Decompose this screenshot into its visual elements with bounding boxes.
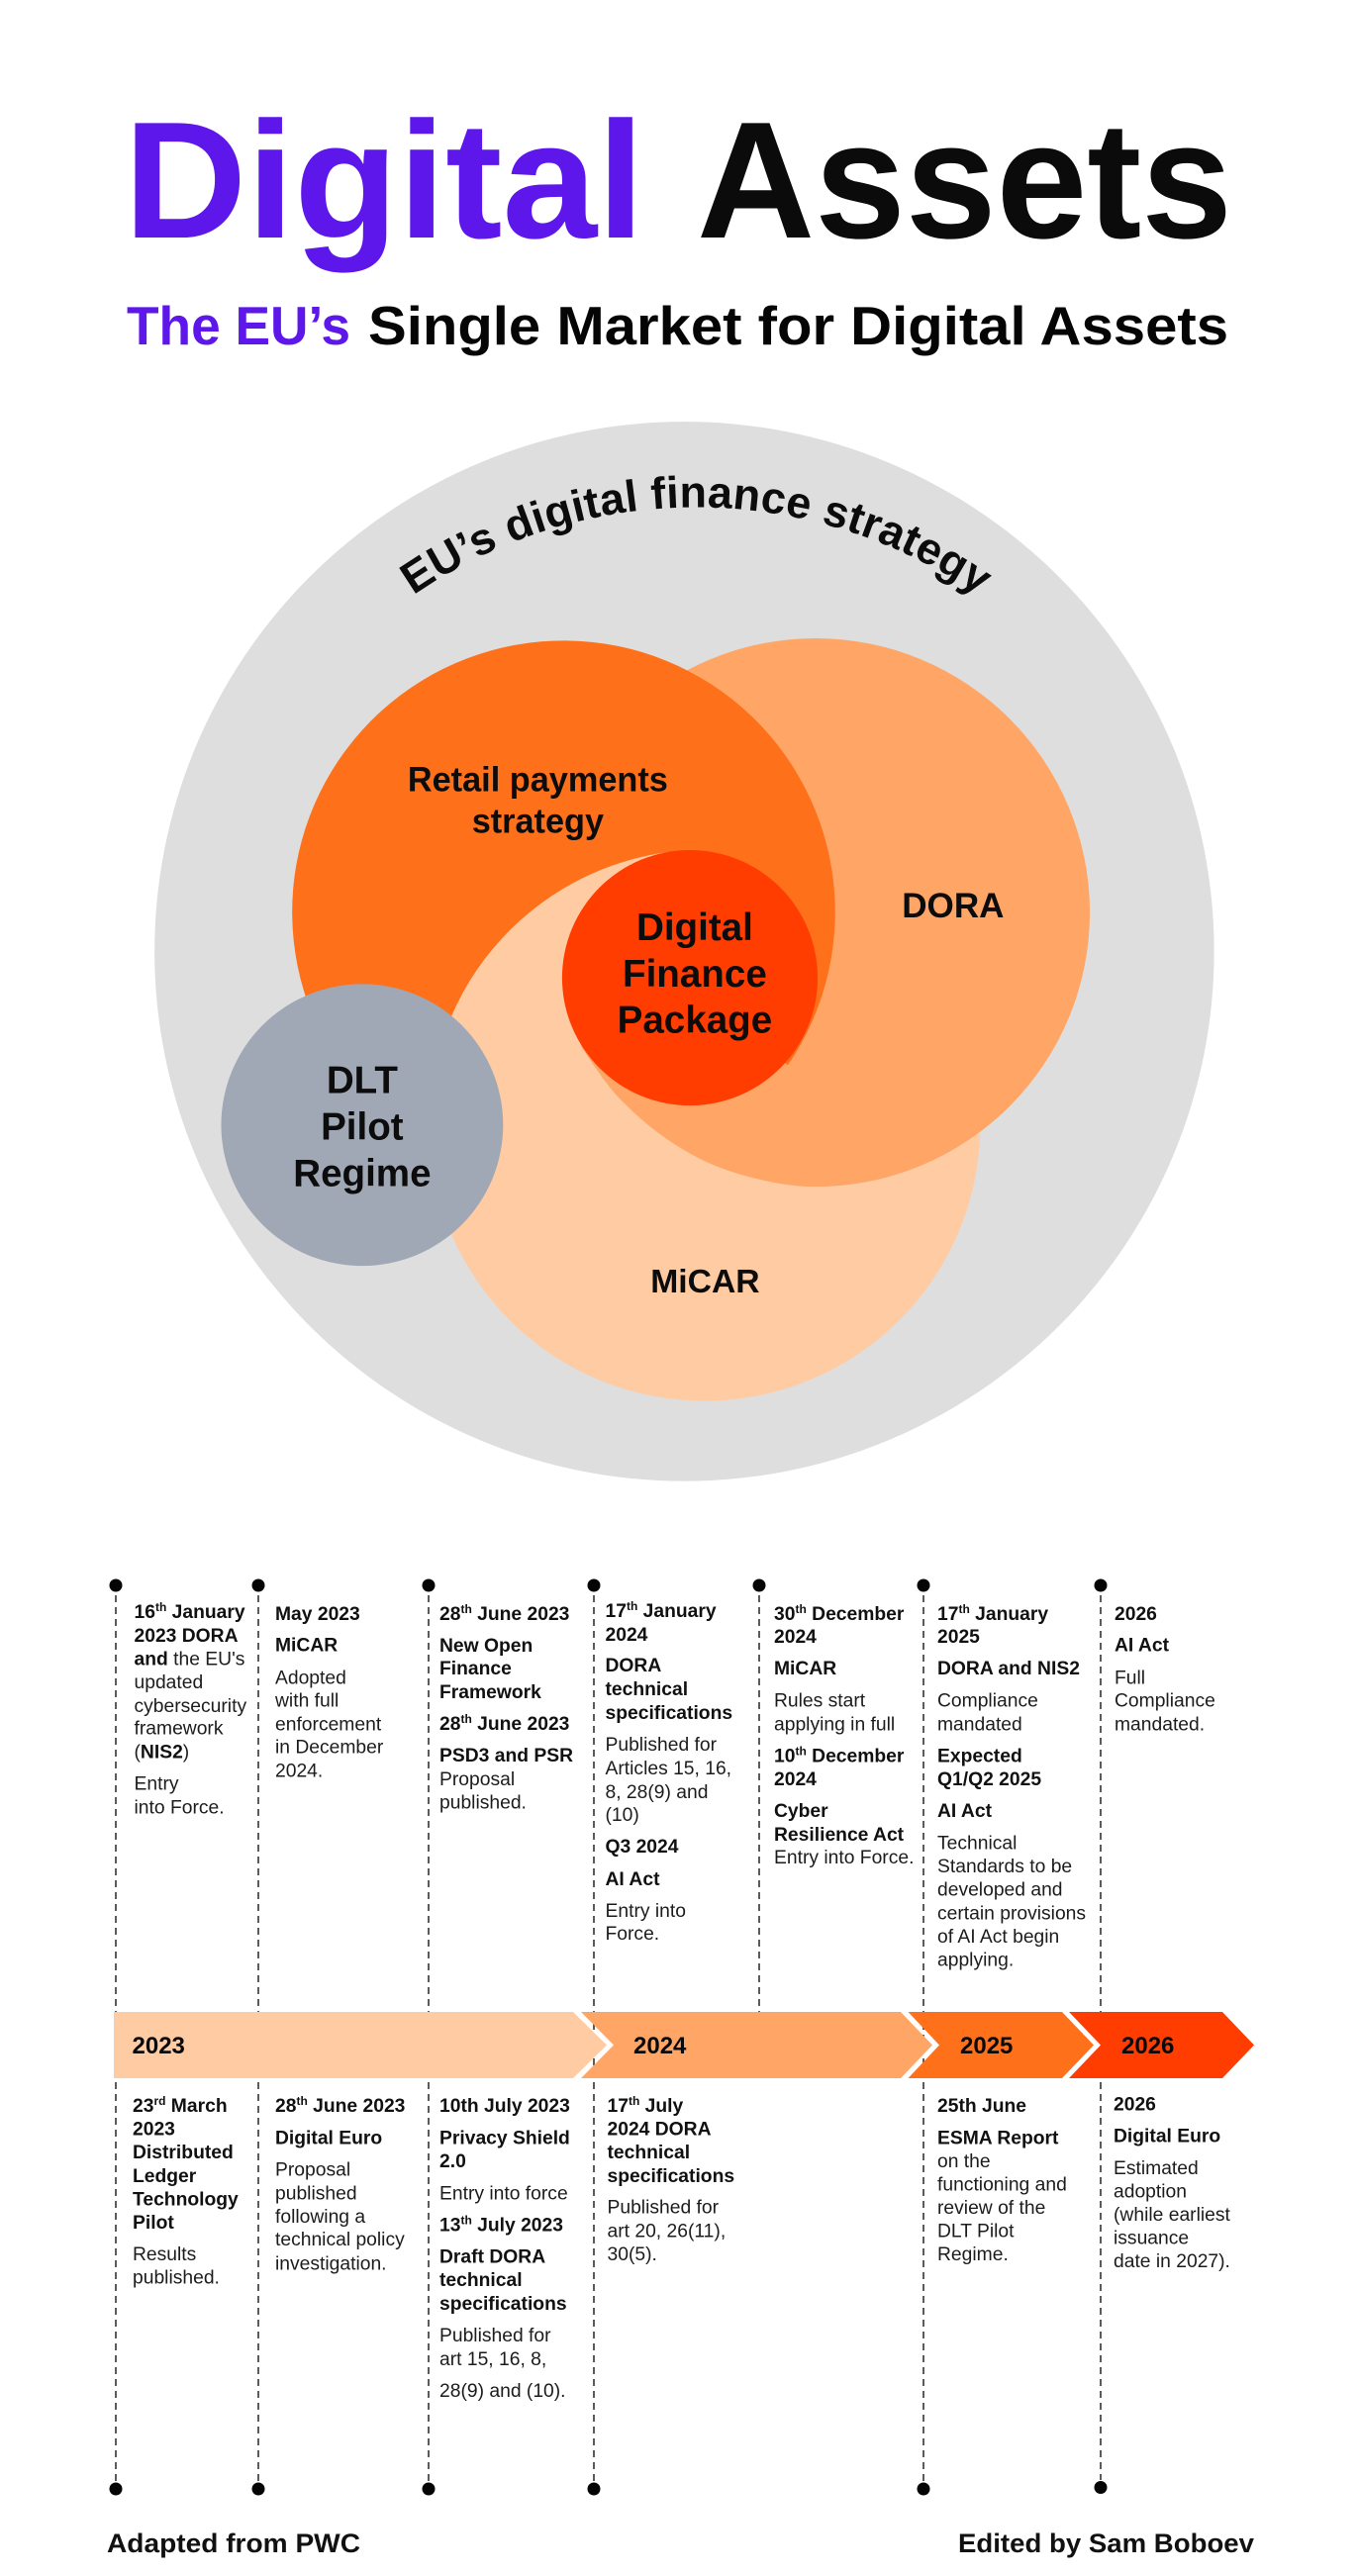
label: Digital Finance Package: Package	[618, 999, 772, 1041]
title: Digital	[124, 87, 644, 273]
entry: January 2024 DORA and Q3 2024 AI Act: (10)	[606, 1805, 639, 1826]
circle: DLT Pilot Regime	[221, 984, 503, 1266]
entry: June 2023 Digital Euro: published	[275, 2183, 357, 2205]
entry: January 2025 DORA and NIS2, AI Act: 17	[937, 1604, 958, 1625]
entry: July 2023 Privacy Shield and draft DORA: 13	[439, 2215, 460, 2237]
label: DLT Pilot Regime: Pilot	[321, 1105, 404, 1148]
entry: March 2023 DLT Pilot: Distributed	[133, 2143, 234, 2163]
entry: December 2024 MiCAR and Cyber Resilience Act: 30	[774, 1604, 795, 1625]
entry: May 2023 MiCAR: May 2023	[275, 1604, 360, 1625]
entry: January 2025 DORA and NIS2, AI Act: th	[958, 1602, 970, 1616]
entry: June 2023 open finance and PSD3: PSD3 and PSR	[439, 1746, 573, 1766]
entry: January 2025 DORA and NIS2, AI Act: Technical	[937, 1834, 1017, 1855]
entry: January 2023 DORA	[135, 1600, 246, 1819]
entry: June 2023 Digital Euro: th	[296, 2094, 308, 2108]
entry: June 2023 open finance and PSD3: Finance	[439, 1659, 512, 1679]
entry: January 2023 DORA: Entry	[135, 1774, 179, 1795]
entry: 2026 Digital Euro	[1114, 2094, 1231, 2272]
entry: January 2023 DORA: and the EU's	[135, 1649, 244, 1670]
entry: January 2024 DORA and Q3 2024 AI Act: Published for	[606, 1735, 718, 1756]
subtitle: The EU’s	[127, 295, 350, 356]
label: DLT Pilot Regime	[293, 1059, 432, 1194]
entry: December 2024 MiCAR and Cyber Resilience Act: MiCAR	[774, 1659, 836, 1679]
entry: July 2023 Privacy Shield and draft DORA: Published for	[439, 2326, 551, 2346]
entry: July 2023 Privacy Shield and draft DORA: July 2023	[472, 2215, 563, 2237]
entry: January 2024 DORA and Q3 2024 AI Act: Entry into	[606, 1901, 686, 1922]
entry: December 2024 MiCAR and Cyber Resilience Act: th	[795, 1602, 807, 1616]
entry: June 2025 ESMA Report: ESMA Report	[937, 2129, 1059, 2149]
label: DLT Pilot Regime: DLT	[327, 1059, 398, 1101]
year arrow: 2023	[114, 2012, 607, 2078]
year arrow: 2026	[1069, 2012, 1254, 2078]
entry: December 2024 MiCAR and Cyber Resilience Act: th	[795, 1745, 807, 1759]
title: Assets	[697, 87, 1232, 273]
entry: June 2023 Digital Euro: investigation.	[275, 2254, 387, 2274]
entry: 2026 Digital Euro: adoption	[1114, 2182, 1187, 2203]
entry: January 2024 DORA and Q3 2024 AI Act: AI Act	[606, 1869, 660, 1890]
venn diagram: EU's digital finance strategy	[154, 422, 1213, 1480]
footer: source credit: Adapted from PWC	[107, 2528, 360, 2558]
entry: 2026 AI Act: AI Act	[1115, 1636, 1170, 1657]
entry: December 2024 MiCAR and Cyber Resilience Act: applying in full	[774, 1715, 895, 1736]
entry: July 2023 Privacy Shield and draft DORA: 10th July 2023	[439, 2096, 570, 2117]
entry: June 2025 ESMA Report: Regime.	[937, 2244, 1009, 2265]
entry: January 2025 DORA and NIS2, AI Act: Expected	[937, 1747, 1022, 1767]
entry: December 2024 MiCAR and Cyber Resilience Act: Cyber	[774, 1801, 828, 1822]
entry: March 2023 DLT Pilot: 23	[133, 2096, 153, 2117]
circle: DORA	[541, 638, 1090, 1187]
entry: December 2024 MiCAR and Cyber Resilience Act: December	[807, 1747, 905, 1767]
entry: December 2024 MiCAR and Cyber Resilience Act: Resilience Act	[774, 1825, 905, 1846]
entry: May 2023 MiCAR: 2024.	[275, 1762, 323, 1782]
timeline dots	[109, 1579, 1107, 2496]
entry: January 2024 DORA and Q3 2024 AI Act: Force.	[606, 1924, 659, 1945]
entry: January 2025 DORA and NIS2, AI Act: mandated	[937, 1715, 1022, 1736]
entry: June 2023 Digital Euro: June 2023	[308, 2096, 406, 2117]
entry: January 2024 DORA and Q3 2024 AI Act: Articles 15, 16,	[606, 1759, 731, 1779]
entry: June 2023 Digital Euro: technical policy	[275, 2230, 405, 2250]
entry: January 2024 DORA and Q3 2024 AI Act: 8, 28(9) and	[606, 1782, 708, 1803]
entry: January 2025 DORA and NIS2, AI Act: Q1/Q2 2025	[937, 1769, 1041, 1790]
year arrow: 2024	[581, 2012, 932, 2078]
entry: 2026 Digital Euro: 2026	[1114, 2094, 1156, 2115]
entry: March 2023 DLT Pilot: Ledger	[133, 2166, 197, 2187]
year arrow: 2026: 2026	[1121, 2033, 1174, 2059]
entry: July 2024 DORA: Published for	[608, 2198, 720, 2219]
entry: January 2024 DORA and Q3 2024 AI Act: Q3 2024	[606, 1837, 679, 1858]
entry: January 2023 DORA: 16	[135, 1602, 155, 1623]
entry: July 2024 DORA: 30(5).	[608, 2244, 657, 2265]
entry: March 2023 DLT Pilot: Pilot	[133, 2213, 174, 2234]
entry: March 2023 DLT Pilot	[133, 2094, 239, 2289]
entry: July 2023 Privacy Shield and draft DORA	[439, 2096, 570, 2402]
entry: June 2023 open finance and PSD3: June 2023	[472, 1714, 570, 1735]
entry: July 2024 DORA: specifications	[608, 2166, 734, 2187]
outer circle	[154, 422, 1214, 1481]
entry: June 2023 Digital Euro: Proposal	[275, 2160, 350, 2181]
entry: January 2025 DORA and NIS2, AI Act: of AI Act begin	[937, 1927, 1059, 1948]
entry: December 2024 MiCAR and Cyber Resilience Act: December	[807, 1604, 905, 1625]
entry: June 2023 open finance and PSD3: 28	[439, 1604, 460, 1625]
entry: December 2024 MiCAR and Cyber Resilience Act: Rules start	[774, 1691, 866, 1712]
entry: June 2023 Digital Euro: following a	[275, 2207, 365, 2228]
entry: June 2023 open finance and PSD3: June 2023	[472, 1604, 570, 1625]
entry: January 2023 DORA: (NIS2)	[135, 1743, 189, 1764]
entry: 2026 Digital Euro: Digital Euro	[1114, 2126, 1220, 2147]
entry: January 2025 DORA and NIS2, AI Act: Standards to be	[937, 1857, 1072, 1877]
entry: January 2025 DORA and NIS2, AI Act	[937, 1602, 1086, 1971]
entry: June 2023 open finance and PSD3: published.	[439, 1793, 527, 1814]
entry: May 2023 MiCAR: with full	[274, 1691, 339, 1712]
entry: January 2024 DORA and Q3 2024 AI Act: DORA	[606, 1656, 661, 1676]
entry: January 2024 DORA and Q3 2024 AI Act: specifications	[606, 1703, 732, 1724]
entry: June 2025 ESMA Report: on the	[937, 2151, 991, 2172]
label: Digital Finance Package	[618, 906, 772, 1041]
entry: 2026 Digital Euro: (while earliest	[1114, 2205, 1231, 2226]
entry: June 2023 open finance and PSD3: th	[460, 1712, 472, 1726]
entry: June 2025 ESMA Report	[937, 2096, 1067, 2265]
entry: January 2025 DORA and NIS2, AI Act: certain provisions	[937, 1904, 1086, 1925]
entry: March 2023 DLT Pilot: 2023	[133, 2120, 175, 2141]
entry: July 2023 Privacy Shield and draft DORA: art 15, 16, 8,	[439, 2349, 546, 2370]
entry: June 2023 open finance and PSD3: Framework	[439, 1682, 541, 1703]
entry: May 2023 MiCAR: Adopted	[275, 1669, 346, 1689]
entry: December 2024 MiCAR and Cyber Resilience Act: Entry into Force.	[774, 1848, 914, 1868]
label: DORA: DORA	[902, 887, 1004, 925]
entry: January 2023 DORA: January	[166, 1602, 245, 1623]
entry: 2026 Digital Euro: issuance	[1114, 2229, 1189, 2248]
year arrow: 2025	[909, 2012, 1094, 2078]
entry: March 2023 DLT Pilot: Results	[133, 2244, 196, 2265]
entry: July 2024 DORA: 2024 DORA	[608, 2120, 712, 2141]
circle: Digital Finance Package	[562, 850, 818, 1105]
entry: January 2025 DORA and NIS2, AI Act: applying.	[937, 1951, 1014, 1971]
label: Retail payments strategy: strategy	[472, 802, 604, 840]
entry: July 2024 DORA: July	[639, 2096, 683, 2117]
entry: December 2024 MiCAR and Cyber Resilience Act	[774, 1602, 914, 1868]
label: Retail payments strategy: Retail payments	[408, 760, 668, 799]
entry: January 2025 DORA and NIS2, AI Act: developed and	[937, 1880, 1063, 1901]
title	[124, 87, 1232, 273]
entry: May 2023 MiCAR	[274, 1604, 384, 1782]
entry: July 2024 DORA: art 20, 26(11),	[608, 2221, 726, 2242]
entry: 2026 AI Act: Compliance	[1115, 1691, 1215, 1712]
label: Digital Finance Package: Finance	[623, 953, 767, 996]
entry: 2026 AI Act	[1115, 1604, 1215, 1736]
entry: June 2025 ESMA Report: functioning and	[937, 2175, 1067, 2195]
entry: 2026 Digital Euro: Estimated	[1114, 2158, 1199, 2179]
label: Digital Finance Package: Digital	[636, 906, 753, 949]
entry: January 2025 DORA and NIS2, AI Act: 2025	[937, 1627, 980, 1648]
entry: January 2025 DORA and NIS2, AI Act: DORA and NIS2	[937, 1659, 1080, 1679]
entry: July 2023 Privacy Shield and draft DORA: 2.0	[439, 2151, 466, 2172]
entry: June 2023 Digital Euro: 28	[275, 2096, 296, 2117]
shape: Retail payments	[292, 640, 835, 1100]
entry: June 2023 Digital Euro: Digital Euro	[275, 2129, 382, 2149]
entry: May 2023 MiCAR: in December	[275, 1738, 384, 1759]
entry: January 2025 DORA and NIS2, AI Act: January	[970, 1604, 1048, 1625]
entry: January 2024 DORA and Q3 2024 AI Act: January	[637, 1601, 717, 1622]
entry: 2026 AI Act: Full	[1115, 1669, 1145, 1689]
subtitle: Single Market for Digital Assets	[368, 295, 1228, 356]
entry: July 2023 Privacy Shield and draft DORA: specifications	[439, 2294, 567, 2315]
entry: July 2024 DORA: technical	[608, 2143, 690, 2163]
entry: June 2023 open finance and PSD3: Proposal	[439, 1769, 515, 1790]
year arrow: 2024: 2024	[633, 2033, 687, 2059]
entry: March 2023 DLT Pilot: Technology	[133, 2189, 239, 2210]
entry: January 2023 DORA: updated	[135, 1672, 203, 1693]
entry: January 2024 DORA and Q3 2024 AI Act: 17	[606, 1601, 627, 1622]
entry: July 2024 DORA	[608, 2094, 734, 2265]
entry: December 2024 MiCAR and Cyber Resilience Act: 10	[774, 1747, 795, 1767]
entry: July 2023 Privacy Shield and draft DORA: Draft DORA	[439, 2246, 545, 2268]
label: Retail payments strategy	[408, 760, 668, 840]
entry: 2026 Digital Euro: date in 2027).	[1114, 2251, 1230, 2272]
entry: June 2023 open finance and PSD3: 28	[439, 1714, 460, 1735]
entry: July 2023 Privacy Shield and draft DORA: technical	[439, 2270, 523, 2291]
entry: January 2025 DORA and NIS2, AI Act: AI Act	[937, 1801, 993, 1822]
timeline	[109, 1579, 1254, 2496]
entry: June 2025 ESMA Report: review of the	[937, 2198, 1045, 2219]
entry: July 2024 DORA: 17	[608, 2096, 629, 2117]
entry: March 2023 DLT Pilot: published.	[133, 2268, 220, 2289]
year arrow: 2025: 2025	[960, 2033, 1013, 2059]
entry: July 2023 Privacy Shield and draft DORA: th	[460, 2213, 472, 2227]
dashed timeline lines	[116, 1595, 1101, 2482]
year arrow: 2023: 2023	[133, 2033, 185, 2059]
entry: January 2024 DORA and Q3 2024 AI Act: technical	[606, 1679, 688, 1700]
entry: March 2023 DLT Pilot: March	[165, 2096, 228, 2117]
entry: December 2024 MiCAR and Cyber Resilience Act: 2024	[774, 1627, 817, 1648]
entry: July 2023 Privacy Shield and draft DORA: Entry into force	[439, 2183, 568, 2205]
entry: March 2023 DLT Pilot: rd	[153, 2094, 165, 2108]
entry: June 2023 open finance and PSD3: th	[460, 1602, 472, 1616]
entry: January 2024 DORA and Q3 2024 AI Act: th	[627, 1599, 637, 1613]
entry: June 2025 ESMA Report: 25th June	[937, 2096, 1026, 2117]
entry: January 2024 DORA and Q3 2024 AI Act: 2024	[606, 1625, 648, 1646]
entry: July 2023 Privacy Shield and draft DORA: 28(9) and (10).	[439, 2381, 566, 2402]
entry: June 2023 open finance and PSD3	[439, 1602, 573, 1814]
entry: 2026 AI Act: 2026	[1115, 1604, 1157, 1625]
footer: editor credit: Edited by Sam Boboev	[958, 2528, 1254, 2558]
entry: 2026 AI Act: mandated.	[1115, 1715, 1205, 1736]
entry: January 2025 DORA and NIS2, AI Act: Compliance	[937, 1691, 1038, 1712]
entry: December 2024 MiCAR and Cyber Resilience Act: 2024	[774, 1769, 817, 1790]
entry: January 2023 DORA: 2023 DORA	[135, 1626, 239, 1647]
entry: June 2023 Digital Euro	[275, 2094, 406, 2274]
entry: January 2023 DORA: cybersecurity	[135, 1696, 246, 1717]
entry: June 2025 ESMA Report: DLT Pilot	[937, 2221, 1015, 2242]
entry: January 2023 DORA: framework	[135, 1719, 224, 1740]
entry: May 2023 MiCAR: enforcement	[275, 1715, 382, 1736]
shape: MiCAR	[429, 850, 980, 1401]
entry: July 2023 Privacy Shield and draft DORA: Privacy Shield	[439, 2129, 570, 2149]
entry: May 2023 MiCAR: MiCAR	[275, 1636, 338, 1657]
curved heading: EU’s digital finance strategy	[399, 475, 992, 595]
entry: June 2023 open finance and PSD3: New Open	[439, 1636, 533, 1657]
label: MiCAR: MiCAR	[650, 1264, 760, 1300]
entry: January 2023 DORA: into Force.	[135, 1798, 225, 1819]
entry: January 2023 DORA: th	[155, 1600, 166, 1614]
label: DLT Pilot Regime: Regime	[293, 1152, 432, 1194]
entry: July 2024 DORA: th	[629, 2094, 639, 2108]
entry: January 2024 DORA and Q3 2024 AI Act	[606, 1599, 732, 1945]
